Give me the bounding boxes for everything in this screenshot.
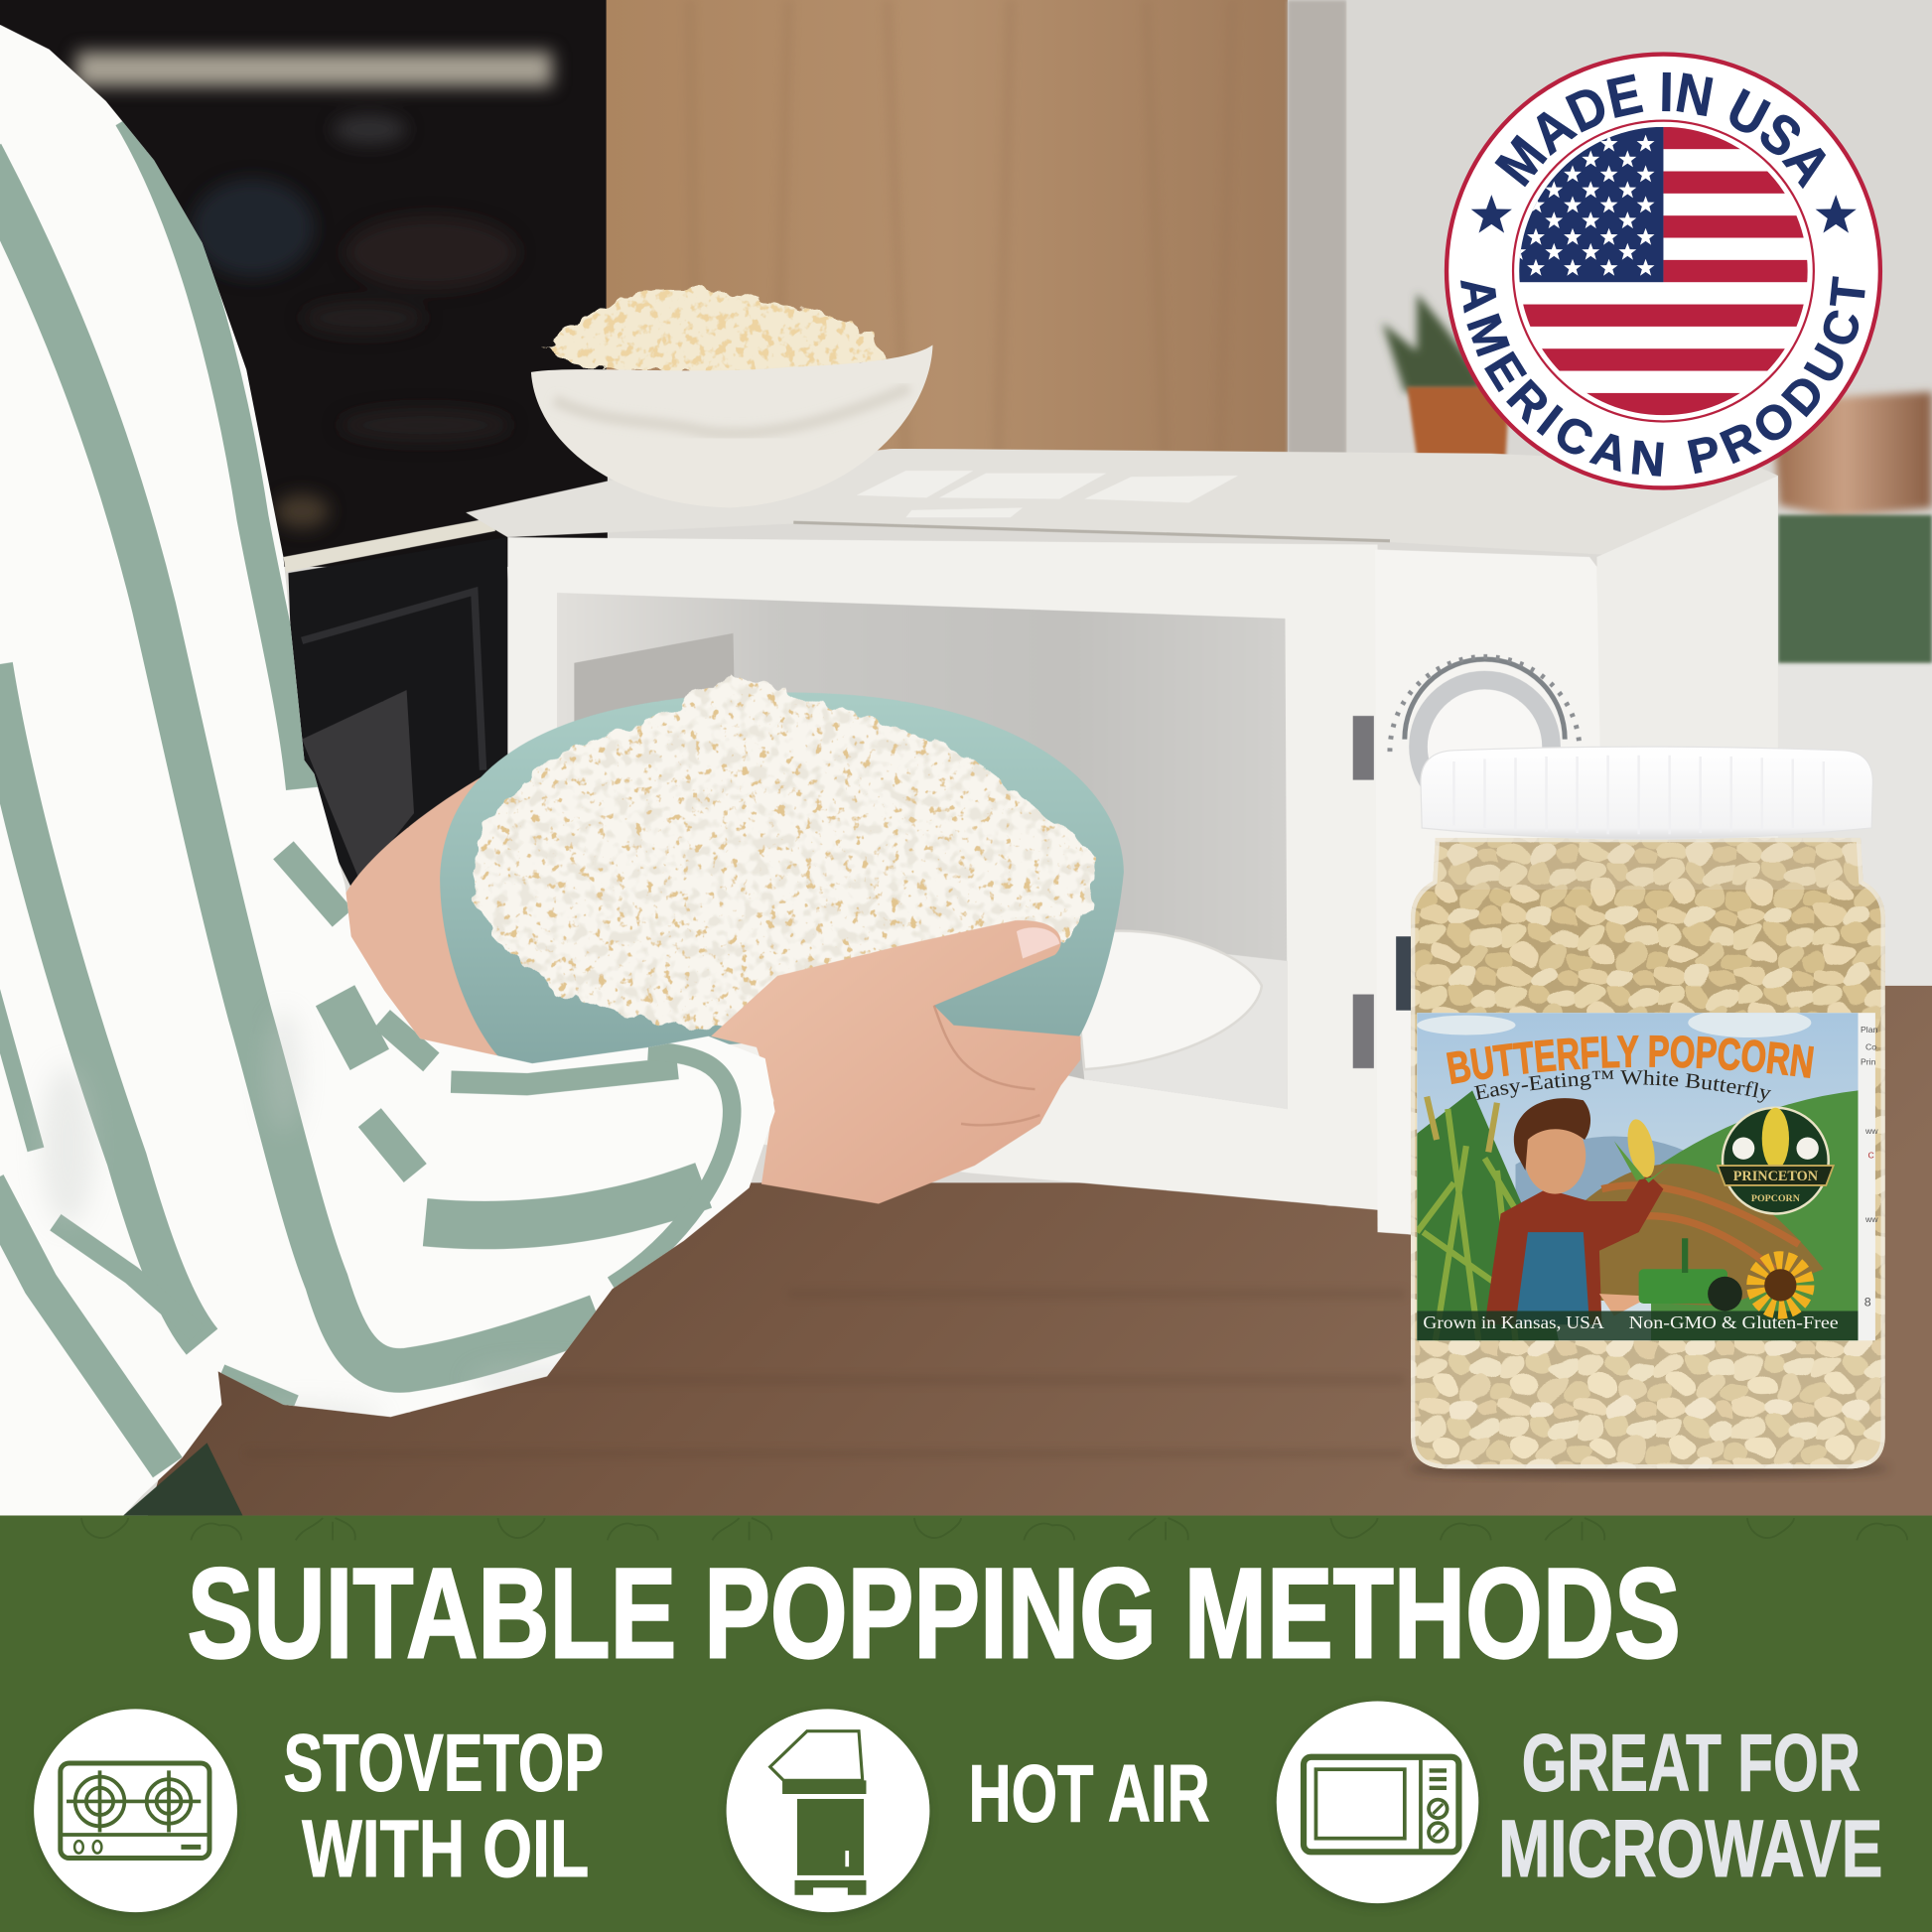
bottom dark strip [1417,1311,1859,1340]
label artwork [1417,1008,1859,1340]
potted plant [1382,293,1509,459]
open door [283,517,515,899]
american flag [1508,127,1811,415]
label side panel text [1861,1025,1878,1310]
popcorn heap [474,673,1097,1031]
right hand under bowl [711,920,1080,1204]
popcorn jar [1411,747,1885,1481]
label left claim: Grown in Kansas, USA [1423,1312,1604,1332]
label side panel text: ww [1864,1214,1878,1224]
label subtitle: Easy-Eating™ White Butterfly [1473,1070,1771,1103]
badge text bottom: AMERICAN PRODUCT [1460,276,1865,477]
white bowl of popcorn on microwave [531,288,932,507]
dark shirt hem [123,1443,242,1516]
label side panel text: 8 [1864,1296,1871,1310]
label side panel text: Prin [1861,1056,1876,1066]
top vents [857,471,1238,517]
green methods band [0,1516,1932,1932]
thumbnail [1017,927,1059,959]
tractor [1639,1238,1742,1311]
teal bowl of popcorn [440,673,1124,1069]
copper pot and green tiles [1772,392,1932,663]
cavity [557,593,1288,1109]
dark oven cabinet [0,0,608,567]
icon: stovetop [34,1709,237,1912]
white bowl [531,345,932,507]
inner ring [1513,121,1814,421]
label side panel text: ww [1864,1126,1878,1136]
popcorn in white bowl [545,288,885,374]
Princeton Popcorn logo [1718,1108,1834,1213]
method: stovetop [34,1709,604,1916]
Princeton Popcorn logo: POPCORN [1751,1193,1801,1204]
wooden table [148,986,1932,1516]
stovetop text: STOVETOP [283,1718,604,1808]
farmer [1484,1098,1663,1324]
turntable plate [1072,931,1262,1069]
wood panel [607,0,1288,459]
sunflower [1756,1261,1805,1310]
microwave front [507,537,1378,1210]
microwave oven [283,449,1778,1235]
left hand behind bowl [343,773,505,1057]
icon: hot air popper [727,1709,929,1912]
microwave top [466,449,1778,554]
background kitchen photo [0,0,1932,1528]
circle shadow [35,1714,236,1916]
method: hot air [727,1709,1210,1916]
corn cob in hand [1614,1117,1670,1182]
corn stalks [1417,1090,1559,1340]
hot air text: HOT AIR [968,1748,1210,1839]
Made in USA badge [1444,52,1882,490]
main torso stripe [0,154,598,1370]
badge disc [1447,55,1880,487]
wall strip and wall [1288,0,1932,988]
jar lid [1421,747,1872,839]
method: microwave [1277,1702,1882,1907]
with oil text: WITH OIL [302,1804,589,1894]
label side panel text: Plan [1861,1025,1878,1035]
product label [1417,1013,1878,1340]
label right claim: Non-GMO & Gluten-Free [1629,1312,1839,1332]
badge text top: MADE IN USA [1495,71,1827,189]
label side panel text: C [1867,1151,1874,1161]
jar shadow [1409,1460,1889,1477]
jar body with kernels [1411,838,1885,1469]
striped shirt sleeve [0,0,788,1528]
control panel [1353,550,1604,1235]
badge star right [1816,195,1857,233]
icon: microwave [1277,1702,1478,1903]
label title: BUTTERFLY POPCORN [1446,1035,1815,1084]
circle shadow [1277,1706,1478,1907]
Princeton Popcorn logo: PRINCETON [1733,1169,1819,1184]
badge star left [1471,195,1512,233]
bowl [440,692,1124,1069]
microwave side [1596,476,1778,986]
label side panel text: Co [1865,1041,1876,1051]
circle shadow [727,1714,929,1916]
